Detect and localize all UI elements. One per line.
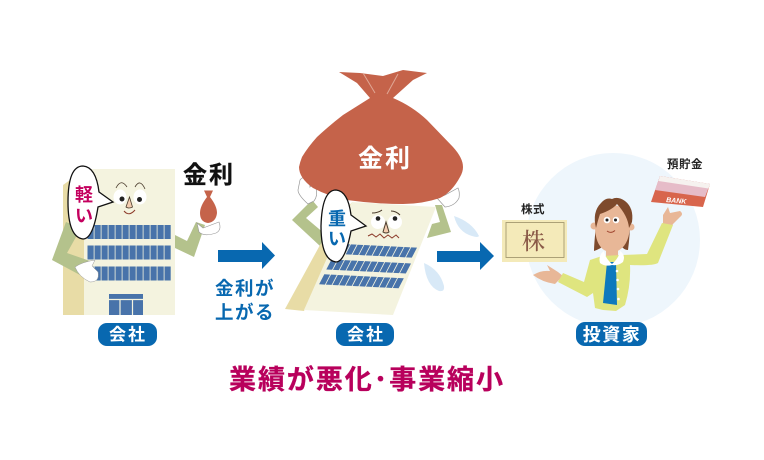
windows — [322, 249, 415, 283]
label: investor — [576, 322, 647, 346]
collar — [600, 251, 624, 266]
cardigan — [558, 223, 673, 311]
icon: sweat drops — [424, 216, 479, 291]
arrow: to investor — [437, 242, 494, 270]
icon: money bag: 金利 — [358, 145, 412, 173]
icon: stock certificate: 株 — [522, 223, 545, 256]
buttons — [616, 270, 620, 300]
left hand — [533, 265, 563, 284]
text: interest rises — [215, 278, 275, 323]
label: stock: 株式 — [521, 202, 545, 216]
speech bubble: heavy — [321, 190, 366, 262]
label: company — [336, 323, 394, 346]
icon: bank card: BANK — [666, 197, 688, 206]
neck — [606, 246, 618, 264]
building side — [63, 170, 84, 315]
background circle — [526, 153, 700, 327]
heading: interest: 金利 — [183, 162, 235, 189]
label: deposit: 預貯金 — [667, 157, 703, 171]
label: investor: 投資家 — [583, 325, 641, 345]
eyes — [604, 217, 610, 223]
windows — [88, 232, 172, 274]
icon: money bag — [299, 70, 463, 204]
icon: left hand — [75, 260, 98, 282]
door — [109, 294, 143, 315]
speech bubble: light: 軽 — [75, 185, 93, 205]
icon: hands — [298, 177, 459, 207]
icon: arms — [292, 200, 451, 246]
right hand — [662, 207, 682, 226]
panel: light company — [52, 162, 235, 346]
icon: small money bag — [200, 190, 217, 223]
panel: heavy company — [285, 70, 479, 346]
building side — [285, 202, 352, 311]
icon: investor woman — [533, 198, 682, 311]
face — [368, 210, 402, 238]
speech bubble: light: い — [75, 206, 93, 226]
text: interest rises: 金利が — [215, 278, 275, 299]
title: results worsen and business shrinks: 業績が悪化･事業縮小 — [229, 364, 503, 395]
panel: investor — [502, 153, 710, 346]
speech bubble: heavy: 重 — [328, 209, 346, 229]
icon: right hand — [197, 222, 220, 235]
text: interest rises: 上がる — [215, 302, 275, 323]
building front — [84, 169, 175, 315]
icon: right arm — [175, 222, 205, 257]
face — [114, 183, 146, 214]
front hair — [595, 198, 632, 228]
blue shirt — [603, 262, 617, 305]
icon: bank card — [651, 176, 710, 207]
building front — [304, 202, 436, 315]
icon: left arm — [52, 222, 94, 275]
label: company: 会社 — [109, 326, 147, 344]
back hair — [594, 222, 630, 251]
speech bubble: heavy: い — [328, 229, 346, 249]
label: company: 会社 — [347, 326, 385, 344]
label: company — [98, 323, 157, 346]
arrow: interest rises — [218, 242, 275, 269]
icon: stock certificate — [502, 220, 567, 262]
ears and face — [590, 222, 598, 230]
speech bubble: light — [68, 166, 113, 239]
